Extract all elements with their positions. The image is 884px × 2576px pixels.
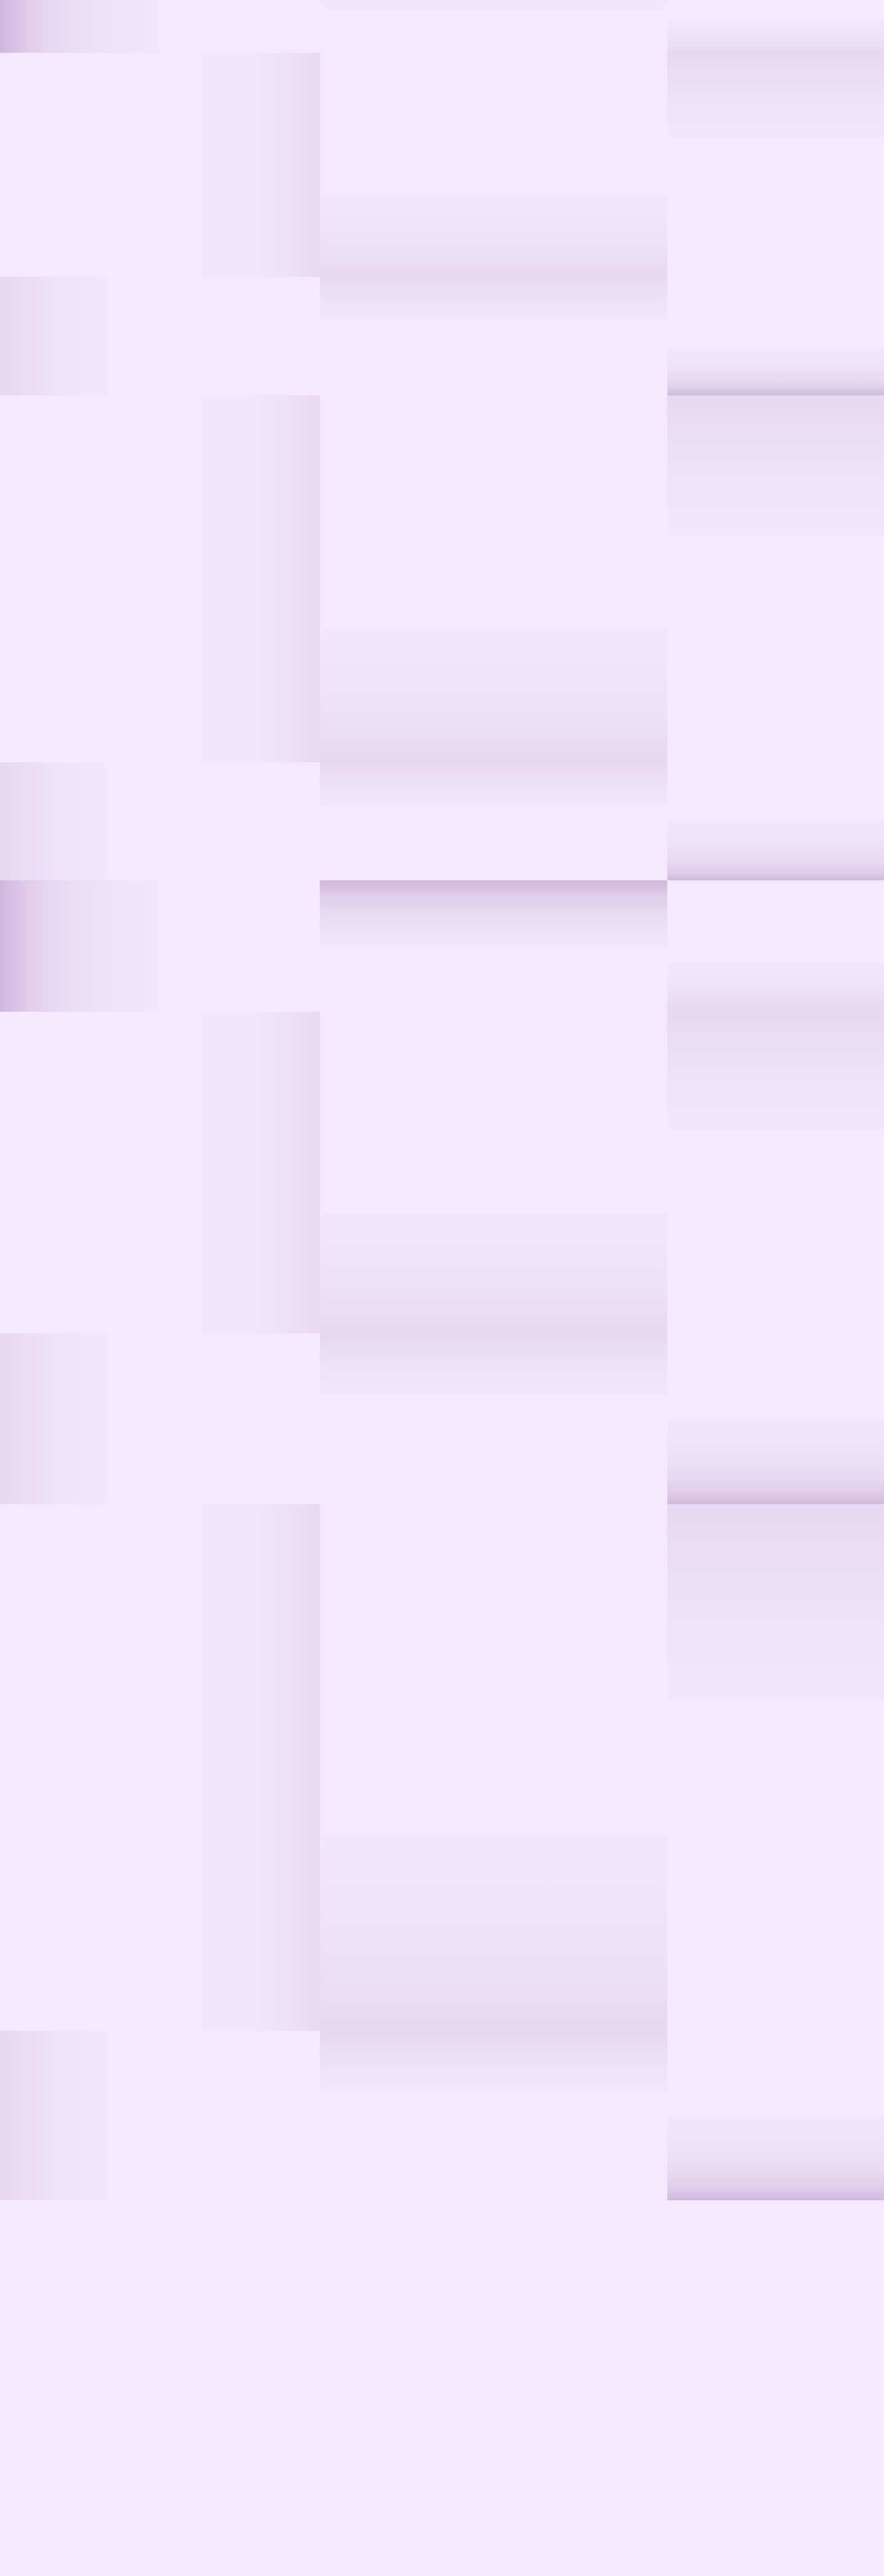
shadow: section 2 bottom left (0, 762, 118, 880)
shadow: band B faint lead (320, 545, 667, 627)
shadow: band D rising (320, 1212, 667, 1333)
panel: left column (0, 0, 320, 2200)
shadow: band D faint lead (320, 1139, 667, 1212)
shadow: band 2 faint lead (667, 320, 884, 348)
shadow: band B falling (320, 762, 667, 807)
panel: right column (667, 41, 884, 2200)
shadow: section 3 top left (0, 880, 158, 1012)
shadow: section 1 top left (0, 0, 158, 53)
panel: middle column (320, 246, 667, 2060)
shadow: band D faint tail (320, 1395, 667, 1432)
shadow: band 4 dark rising (667, 822, 884, 880)
shadow: section 1 right edge (201, 53, 320, 277)
shadow: section 2 right edge (201, 395, 320, 762)
shadow: band 5 falling (667, 1010, 884, 1131)
shadow: band C dark falling (320, 880, 667, 947)
shadow: band 3 falling (667, 395, 884, 533)
shadow: band E faint tail (320, 2095, 667, 2131)
shadow: band 5 rising (667, 963, 884, 1010)
shadow: section 4 right edge (201, 1504, 320, 2031)
shadow: section 3 right edge (201, 1012, 320, 1333)
shadow: band 7 faint tail (667, 1702, 884, 1818)
shadow: band 8 dark rising (667, 2117, 884, 2200)
shadow: band C faint tail (320, 947, 667, 964)
shadow: band 6 faint lead (667, 1395, 884, 1419)
shadow: band E rising (320, 1835, 667, 2031)
shadow: section 3 upper fill (128, 1012, 201, 1333)
shadow: band B rising (320, 627, 667, 762)
shadow: band 1 falling (667, 53, 884, 138)
shadow: band 5 faint lead (667, 935, 884, 963)
shadow: band A faint tail (320, 321, 667, 349)
shadow: band 1 faint tail (667, 138, 884, 186)
shadow: top strip (320, 0, 667, 10)
shadow: band 8 faint lead (667, 2095, 884, 2117)
shadow: band 1 rising (667, 20, 884, 53)
shadow: band B faint tail (320, 807, 667, 832)
shadow: section 1 bottom left (0, 277, 118, 395)
shadow: band 4 faint lead (667, 806, 884, 822)
shadow: band E falling (320, 2031, 667, 2095)
shadow: band 6 dark rising (667, 1419, 884, 1504)
shadow: section 3 bottom left (0, 1333, 118, 1504)
shadow: band A falling (320, 277, 667, 321)
shadow: section 4 bottom left (0, 2031, 118, 2200)
shadow: band 7 falling (667, 1504, 884, 1702)
shadow: band D falling (320, 1333, 667, 1395)
shadow: band 2 dark rising (667, 348, 884, 395)
shadow: band 5 faint tail (667, 1131, 884, 1204)
shadow: band 3 faint tail (667, 533, 884, 613)
shadow: section 2 upper fill (128, 395, 201, 762)
shadow: section 1 upper fill (128, 53, 201, 277)
shadow: band A rising (320, 193, 667, 277)
shadow: section 4 upper fill (128, 1504, 201, 2031)
